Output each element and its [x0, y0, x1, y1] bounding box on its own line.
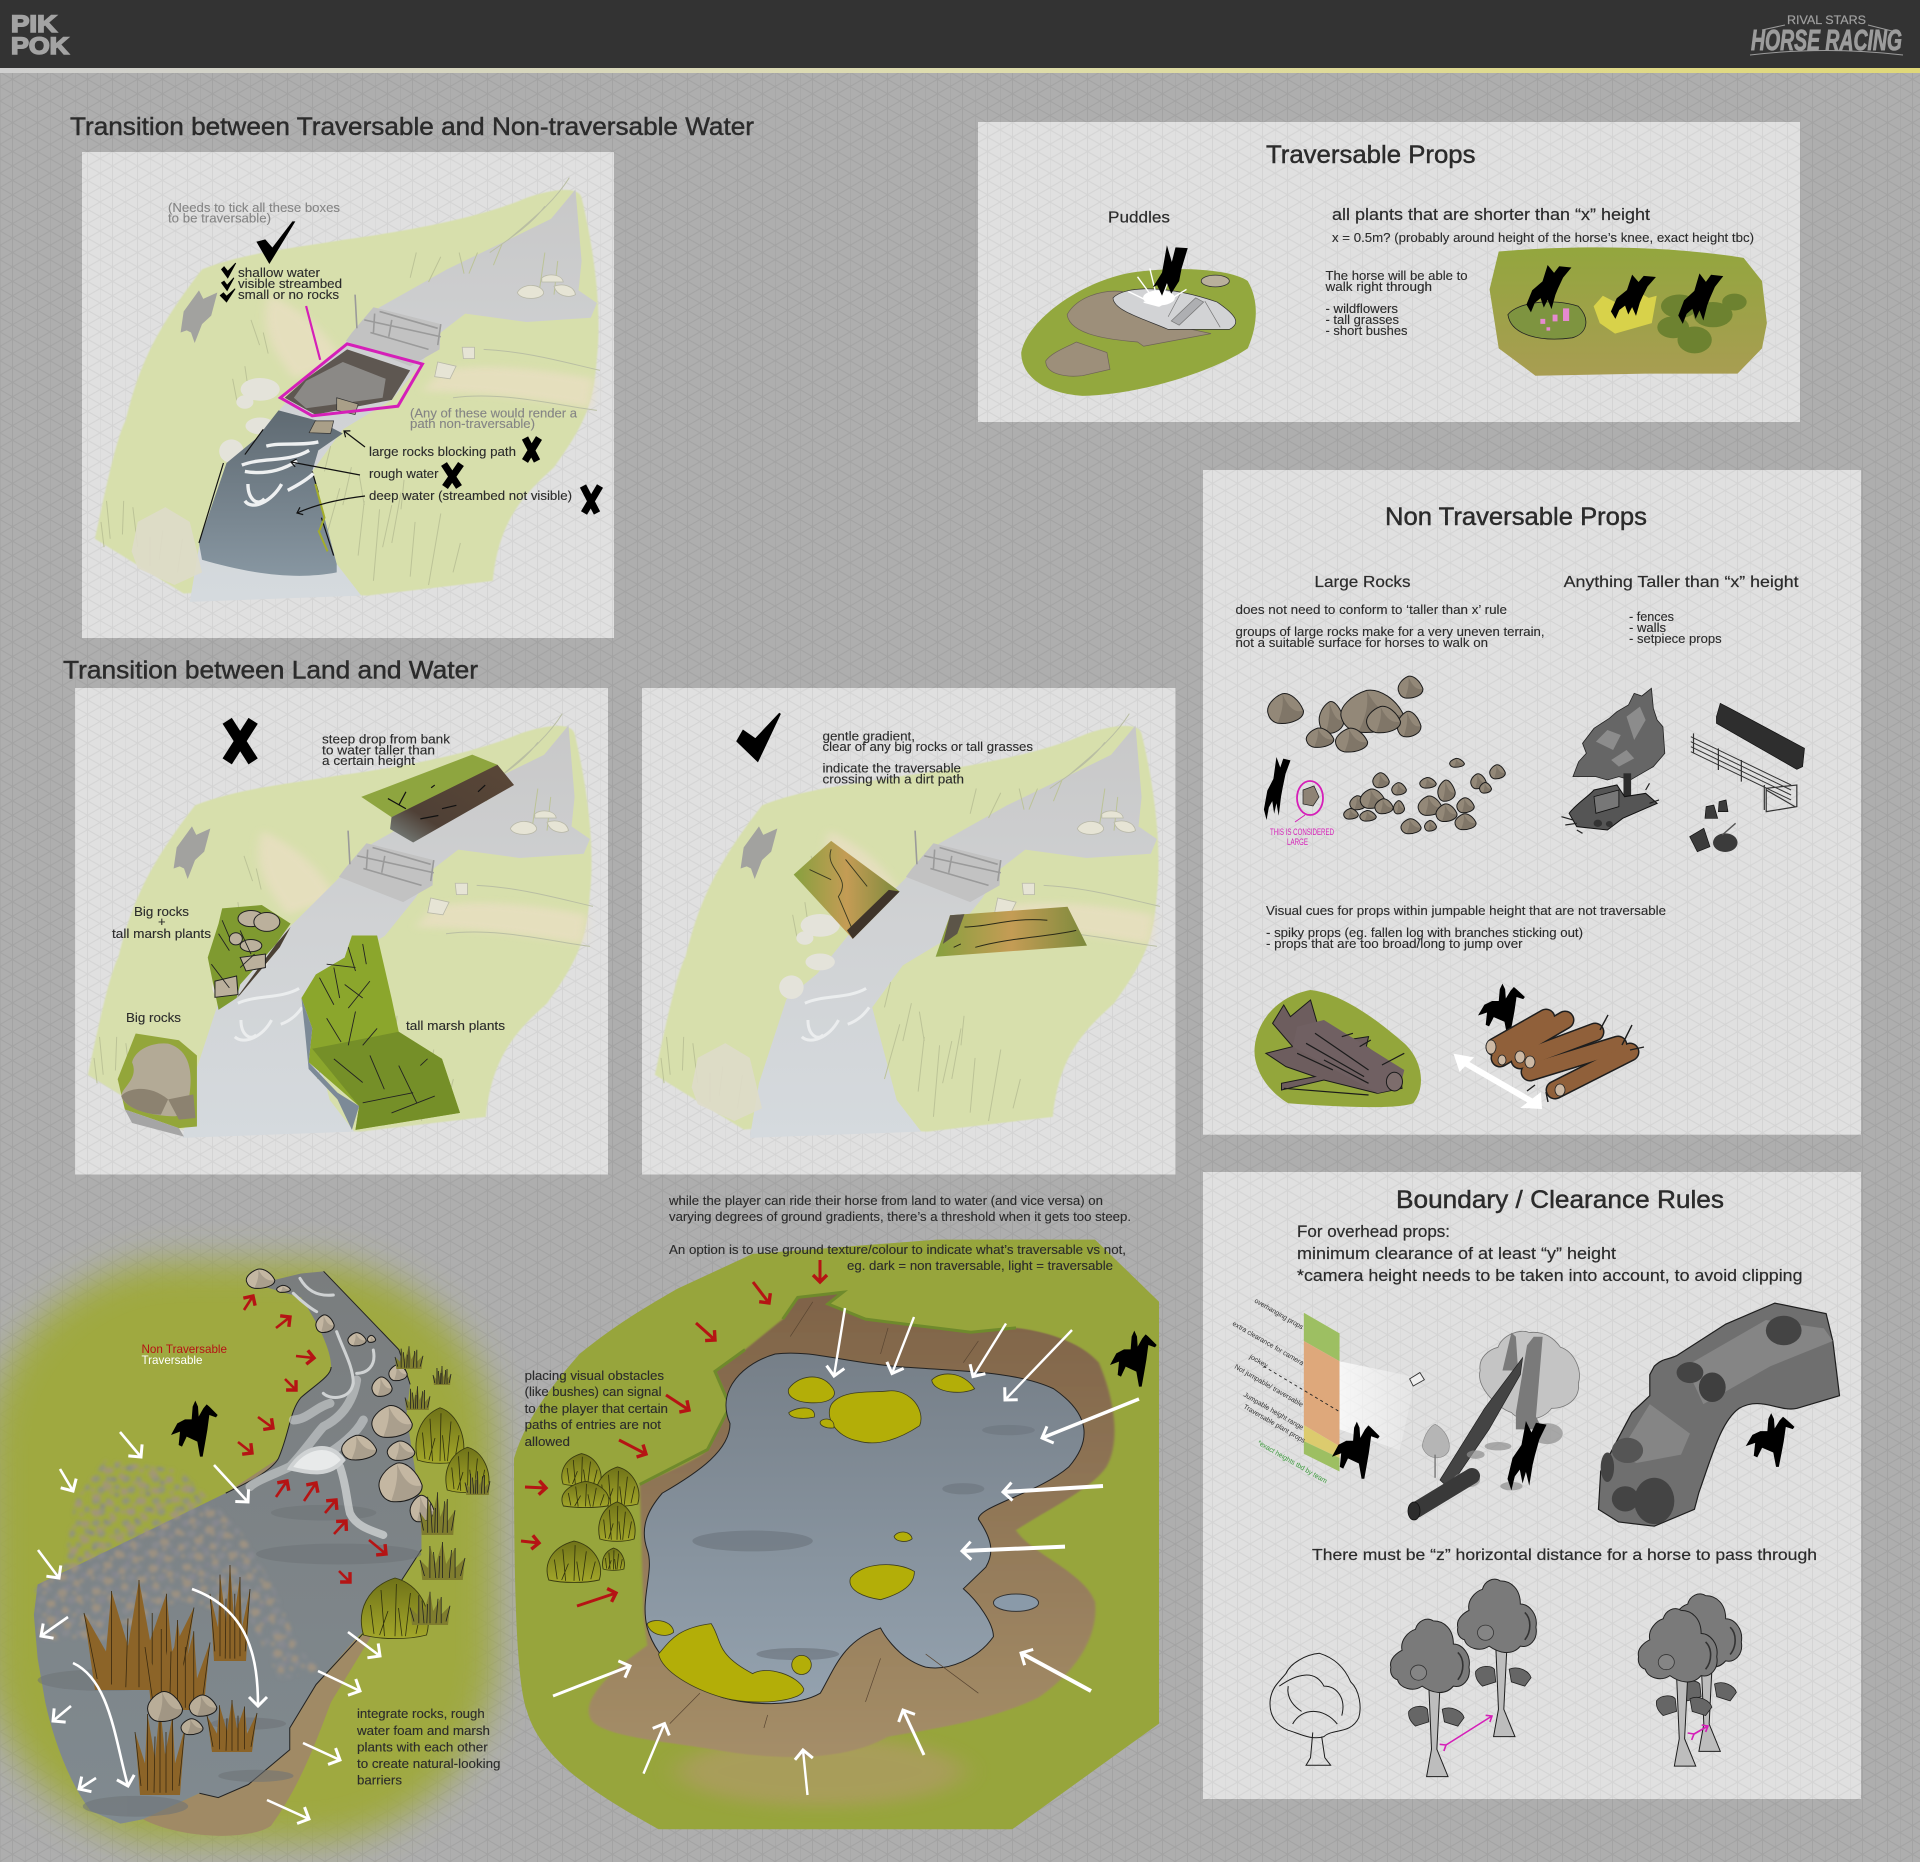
- icon: horse and rider: [171, 1401, 218, 1457]
- text: visual obstacles: to the player that certain: [525, 1401, 668, 1416]
- labels: gentle gradient guidance: clear of any big rocks or tall grasses: [822, 739, 1033, 754]
- chart: clearance height bands: Not jumpable/ traversable: [1233, 1364, 1304, 1409]
- text: gradient threshold: [668, 1193, 1131, 1273]
- bank and water: [589, 1292, 1115, 1757]
- callouts: non-traversable criteria: deep water (streambed not visible): [369, 488, 572, 503]
- illustration: wall, fence and stumps: [1690, 703, 1804, 852]
- tick marks: [220, 222, 294, 302]
- panel: gentle gradient example: [642, 688, 1176, 1174]
- logo: Rival Stars Horse Racing: RIVAL STARS: [1787, 13, 1866, 27]
- callouts: traversable criteria: small or no rocks: [238, 287, 340, 302]
- icon: black horse for scale: [1264, 757, 1290, 820]
- red arrows: steep edges: [521, 1260, 820, 1606]
- labels: gentle gradient guidance: indicate the traversable: [822, 761, 961, 776]
- text: overhead clearance: [1297, 1222, 1802, 1285]
- illustration: trees with enough spacing: [1391, 1579, 1536, 1777]
- illustration: log pile with horse: [1478, 984, 1644, 1102]
- caption: natural barriers: water foam and marsh: [356, 1723, 490, 1738]
- labels: steep bank problems: steep drop from bank: [322, 732, 451, 746]
- red non-traversable arrows: [238, 1296, 386, 1582]
- highlighted streambed crossing: [280, 306, 422, 434]
- illustration: dirt path crossings and tick: [737, 713, 1087, 957]
- text: gradient threshold: while the player can ride their horse from land to water (and vice versa) on: [668, 1193, 1103, 1208]
- title: traversable vs non-traversable water: Transition between Traversable and Non-traversable Water: [70, 113, 754, 141]
- caption: natural barriers: plants with each other: [357, 1740, 488, 1754]
- text: large rocks rule: [1236, 602, 1544, 650]
- panel: steep bank example: [75, 688, 608, 1174]
- text: overhead clearance: *camera height needs to be taken into account, to avoid clipping: [1297, 1266, 1802, 1285]
- title: land and water: Transition between Land and Water: [63, 656, 478, 684]
- boulders: [246, 1269, 434, 1522]
- illustration: leaning tree passage: [1422, 1331, 1580, 1490]
- callouts: traversable criteria: visible streambed: [238, 276, 342, 291]
- foam and rapids: [250, 1278, 383, 1535]
- text: large rocks rule: does not need to conform to ‘taller than x’ rule: [1236, 602, 1507, 617]
- panel: boundary and clearance: [1203, 1172, 1861, 1799]
- text: visual cues: [1266, 903, 1666, 951]
- chart: clearance height bands: Traversable plant props: [1242, 1404, 1307, 1445]
- legend: Traversable: [142, 1353, 203, 1367]
- text: taller props list: - walls: [1629, 620, 1666, 635]
- annotation: this is considered large: LARGE: [1287, 837, 1308, 847]
- caption: natural barriers: barriers: [357, 1772, 402, 1788]
- illustration: rock groups: [1268, 676, 1505, 834]
- callouts: traversable criteria: (Needs to tick all these boxes: [168, 200, 340, 215]
- brown reeds in the water: [84, 1565, 257, 1795]
- callouts: non-traversable criteria: rough water: [369, 466, 439, 481]
- text: visual obstacles: allowed: [525, 1434, 570, 1449]
- legend: [142, 1342, 227, 1367]
- labels: steep bank problems: to water taller than: [322, 742, 435, 757]
- labels: gentle gradient guidance: crossing with a dirt path: [822, 772, 964, 787]
- text: visual obstacles: [525, 1368, 668, 1449]
- text: overhead clearance: minimum clearance of at least “y” height: [1297, 1244, 1616, 1263]
- labels: steep bank problems: a certain height: [322, 753, 415, 768]
- labels: gentle gradient guidance: [822, 728, 1033, 787]
- logo: Rival Stars Horse Racing: [1750, 13, 1903, 57]
- yellow pond weed: [647, 1374, 975, 1702]
- text: visual cues: - props that are too broad/long to jump over: [1266, 936, 1523, 951]
- white traversable arrows: [38, 1432, 380, 1819]
- illustration: horses through plants: [1490, 247, 1767, 376]
- caption: natural barriers: [356, 1706, 500, 1788]
- subheading: puddles: Puddles: [1108, 210, 1170, 226]
- chart: clearance height bands: *exact heights tbd by team: [1256, 1440, 1328, 1485]
- logo: Pik Pok: [11, 11, 70, 60]
- pointer arrows: [291, 431, 365, 513]
- text: plant height rule: [1332, 205, 1754, 245]
- cross marks: [444, 438, 600, 513]
- illustration: spiky fallen log: [1254, 990, 1421, 1107]
- text: walk-through plants: [1324, 268, 1468, 338]
- arrow: width of log pile: [1455, 1055, 1541, 1108]
- chart: clearance height bands: jockey: [1247, 1353, 1269, 1370]
- panel: water transition: [82, 152, 614, 638]
- illustration: outline tree: [1270, 1653, 1360, 1765]
- callouts: traversable criteria: to be traversable): [168, 210, 271, 226]
- header bar: [0, 0, 1920, 73]
- text: walk-through plants: The horse will be able to: [1326, 268, 1468, 283]
- text: large rocks rule: groups of large rocks make for a very uneven terrain,: [1236, 624, 1544, 639]
- heading: Traversable Props: [1266, 141, 1476, 169]
- text: visual obstacles: placing visual obstacles: [525, 1368, 665, 1383]
- caption: natural barriers: integrate rocks, rough: [357, 1706, 485, 1721]
- chart: clearance height bands: Jumpable height range: [1242, 1392, 1304, 1432]
- illustration: trees too close together: [1638, 1594, 1742, 1766]
- subheading: large rocks: Large Rocks: [1314, 574, 1410, 591]
- ground: [514, 1240, 1159, 1829]
- fallen log: [1408, 1476, 1472, 1520]
- deep rough river overlay: [199, 410, 343, 576]
- marsh plants along the right bank: [361, 1346, 490, 1639]
- text: taller props list: - fences: [1629, 609, 1674, 624]
- text: plant height rule: all plants that are shorter than “x” height: [1332, 205, 1650, 224]
- legend: Non Traversable: [142, 1342, 227, 1356]
- labels: steep bank problems: [112, 732, 506, 1033]
- logo: Pik Pok: PIK: [11, 11, 58, 38]
- heading: Boundary / Clearance Rules: [1396, 1186, 1724, 1214]
- text: visual obstacles: paths of entries are not: [525, 1417, 661, 1432]
- annotation: this is considered large: [1270, 781, 1334, 847]
- labels: steep bank problems: Big rocks: [126, 1010, 182, 1025]
- callouts: non-traversable criteria: path non-traversable): [410, 416, 535, 431]
- subheading: taller props: Anything Taller than “x” height: [1564, 574, 1799, 591]
- text: gradient threshold: An option is to use ground texture/colour to indicate what’s traversable vs not,: [669, 1242, 1126, 1257]
- text: visual obstacles: (like bushes) can signal: [525, 1384, 662, 1399]
- illustration: puddle with horse: [1021, 245, 1256, 396]
- illustration: steep drop, rocks and marsh plants: [118, 721, 514, 1137]
- text: overhead clearance: For overhead props:: [1297, 1222, 1450, 1241]
- text: walk-through plants: - tall grasses: [1326, 312, 1399, 327]
- illustration: river with natural barriers: [0, 1262, 500, 1842]
- text: visual cues: - spiky props (eg. fallen log with branches sticking out): [1266, 925, 1583, 940]
- callouts: traversable criteria: shallow water: [238, 265, 321, 280]
- labels: steep bank problems: Big rocks: [134, 904, 190, 919]
- labels: gentle gradient guidance: gentle gradient,: [822, 728, 915, 743]
- text: horizontal distance: There must be “z” horizontal distance for a horse to pass through: [1312, 1547, 1817, 1564]
- panel: traversable props: [978, 122, 1800, 422]
- callouts: traversable criteria: [168, 200, 342, 302]
- water and banks: [34, 1271, 421, 1836]
- callouts: non-traversable criteria: large rocks blocking path: [369, 444, 516, 459]
- text: large rocks rule: not a suitable surface for horses to walk on: [1236, 635, 1488, 650]
- illustration: pond with ground gradient: [514, 1193, 1159, 1829]
- text: gradient threshold: eg. dark = non traversable, light = traversable: [847, 1258, 1113, 1273]
- caption: natural barriers: to create natural-looking: [357, 1756, 500, 1771]
- labels: steep bank problems: tall marsh plants: [112, 926, 212, 941]
- heading: Non Traversable Props: [1385, 503, 1647, 531]
- panel: non traversable props: [1203, 470, 1861, 1135]
- chart: clearance height bands: overhanging props: [1253, 1298, 1305, 1331]
- callouts: non-traversable criteria: [369, 406, 578, 503]
- illustration: tree growing through truck: [1561, 688, 1665, 833]
- rocks among the reeds: [148, 1691, 217, 1735]
- logo: Pik Pok: POK: [11, 33, 70, 60]
- icon: horse and rider: [1110, 1331, 1157, 1387]
- labels: steep bank problems: +: [158, 914, 166, 929]
- text: walk-through plants: - short bushes: [1326, 323, 1408, 338]
- text: walk-through plants: walk right through: [1324, 279, 1432, 294]
- text: taller props list: [1629, 609, 1722, 646]
- illustration: rock arch: [1598, 1303, 1840, 1526]
- chart: clearance height bands: extra clearance for camera: [1231, 1321, 1305, 1367]
- ground: [0, 1262, 496, 1842]
- labels: steep bank problems: tall marsh plants: [406, 1018, 506, 1033]
- chart: clearance height bands: [1231, 1298, 1424, 1485]
- text: plant height rule: x = 0.5m? (probably around height of the horse’s knee, exact height tbc): [1332, 230, 1754, 245]
- bushes as visual obstacles: [547, 1454, 639, 1582]
- text: visual cues: Visual cues for props within jumpable height that are not traversable: [1266, 903, 1666, 918]
- rubble of small rocks: [35, 1460, 320, 1680]
- text: taller props list: - setpiece props: [1629, 631, 1722, 646]
- text: gradient threshold: varying degrees of ground gradients, there’s a threshold when it gets too steep.: [669, 1209, 1131, 1224]
- white arrows: gentle entries: [553, 1308, 1139, 1795]
- callouts: non-traversable criteria: (Any of these would render a: [410, 406, 578, 420]
- text: walk-through plants: - wildflowers: [1326, 301, 1399, 316]
- annotation: this is considered large: THIS IS CONSIDERED: [1270, 827, 1334, 837]
